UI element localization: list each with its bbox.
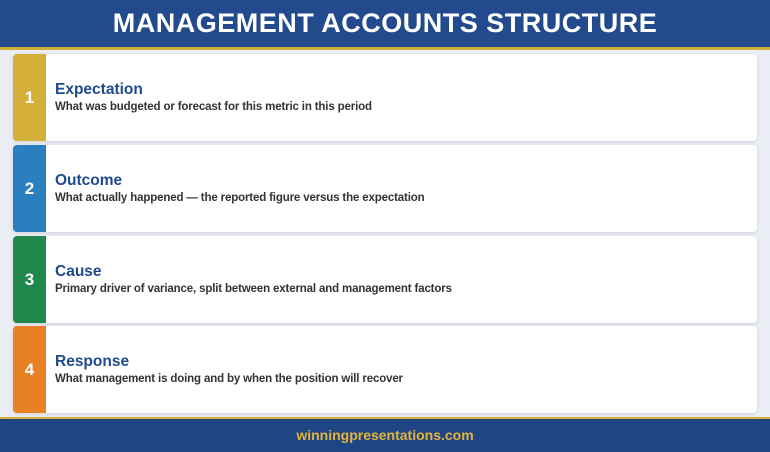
card: response [13, 326, 757, 413]
text: expectation: Expectation [55, 81, 143, 98]
text: cause: Primary driver of variance, split between external and management factors [55, 283, 452, 295]
card: expectation [13, 54, 757, 141]
title [0, 0, 770, 50]
footer [0, 417, 770, 452]
text: response: What management is doing and by when the position will recover [55, 373, 403, 385]
text: cause: Cause [55, 263, 102, 280]
text: outcome: Outcome [55, 172, 122, 189]
text: outcome: What actually happened — the reported figure versus the expectation [55, 192, 425, 204]
text: expectation: What was budgeted or forecast for this metric in this period [55, 101, 372, 113]
card: outcome [13, 145, 757, 232]
footer: winningpresentations.com [296, 427, 474, 443]
badge 4 [13, 326, 46, 413]
text: expectation [55, 81, 372, 113]
badge 2: 2 [25, 178, 34, 198]
text: response [55, 353, 403, 385]
text: outcome [55, 172, 425, 204]
text: cause [55, 263, 452, 295]
badge 4: 4 [25, 360, 34, 378]
title: MANAGEMENT ACCOUNTS STRUCTURE [113, 8, 657, 38]
badge 3 [13, 236, 46, 323]
badge 3: 3 [25, 270, 34, 288]
card: cause [13, 236, 757, 323]
badge 1: 1 [25, 88, 34, 106]
badge 1 [13, 54, 46, 141]
badge 2 [13, 145, 46, 232]
text: response: Response [55, 353, 129, 370]
